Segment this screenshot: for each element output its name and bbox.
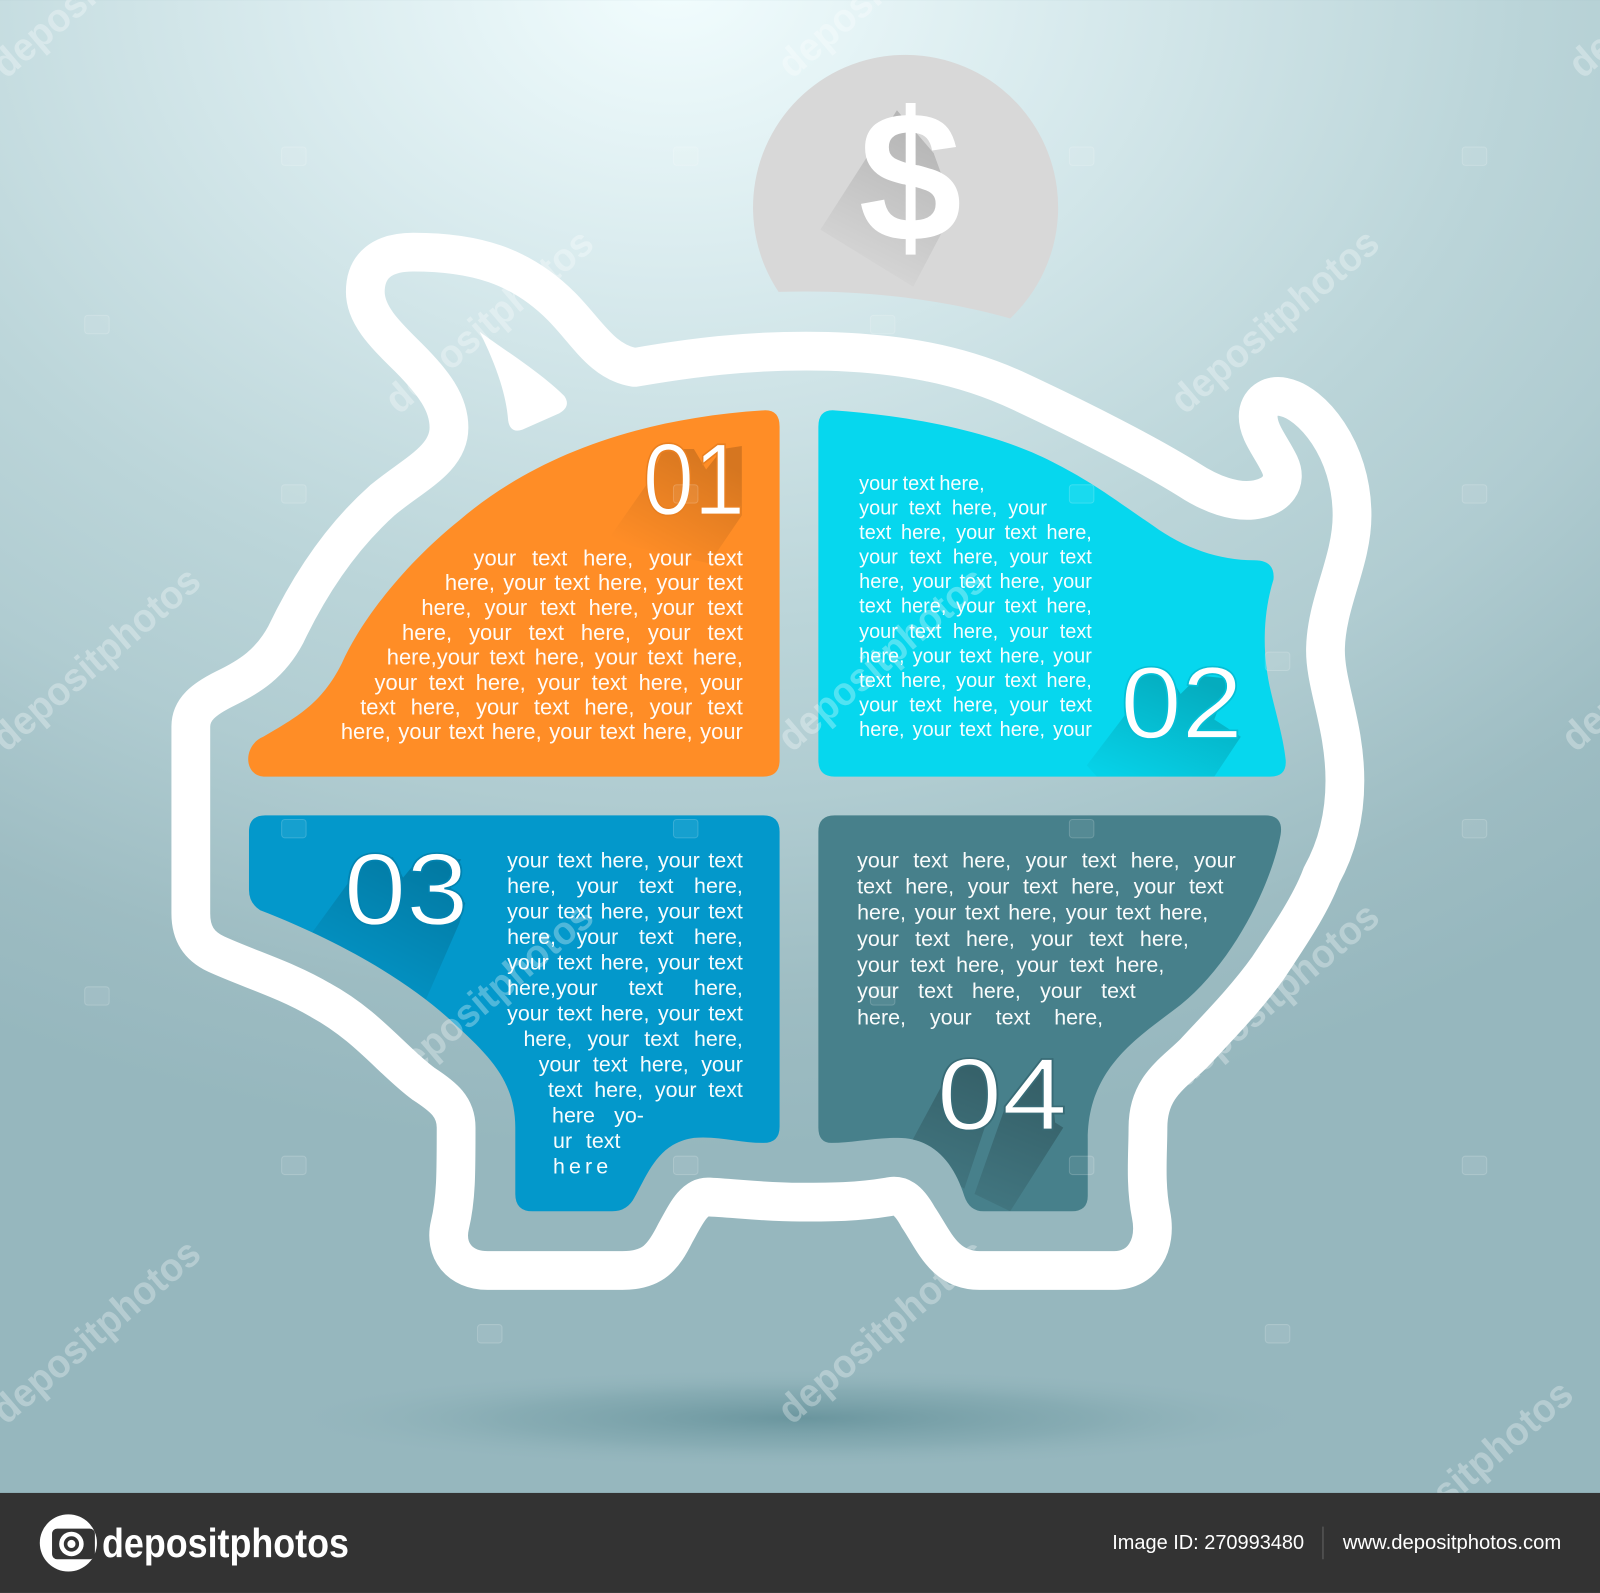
- logo wordmark: depositphotos: [102, 1520, 349, 1566]
- number shadow 04: [908, 1063, 1063, 1211]
- text block 03: here,your text here,: [507, 976, 743, 1000]
- icon: camera logo: [40, 1514, 97, 1572]
- text block 04: your text here, your text: [857, 979, 1136, 1003]
- number 03: 03: [344, 833, 468, 947]
- text block 04: [857, 848, 1236, 1030]
- text block 02: your text here, your text: [859, 621, 1092, 643]
- text block 03: your text here, your: [539, 1053, 743, 1077]
- text block 03: here, your text here,: [523, 1027, 743, 1051]
- watermarks: depositphotos: [376, 894, 602, 1096]
- text block 03: text here, your text: [548, 1078, 743, 1102]
- text block 01: here, your text here, your text: [421, 595, 743, 620]
- watermarks: depositphotos: [1162, 220, 1388, 422]
- number 01: 01: [643, 422, 745, 536]
- number shadow 02: [1087, 674, 1241, 777]
- number 04: 04: [937, 1038, 1067, 1152]
- text block 04: here, your text here,: [857, 1006, 1103, 1030]
- text block 03: here, your text here,: [507, 925, 743, 949]
- coin dollar long shadow: [820, 110, 954, 287]
- piggy tail nub: [480, 332, 567, 431]
- text block 02: text here, your text here,: [859, 670, 1092, 692]
- watermarks: depositphotos: [1356, 1371, 1582, 1573]
- text block 04: your text here, your text here,: [857, 927, 1189, 951]
- text block 03: [507, 848, 743, 1179]
- text block 01: here,your text here, your text here,: [387, 644, 743, 669]
- text block 02: [859, 473, 1092, 741]
- panel 04: dark teal: [818, 815, 1281, 1211]
- coin: [753, 55, 1058, 318]
- text block 02: here, your text here, your: [859, 645, 1092, 667]
- footer bar: [0, 1493, 1600, 1593]
- number shadow 03: [311, 857, 465, 1005]
- text block 03: your text here, your text: [507, 899, 743, 923]
- watermarks: depositphotos: [769, 1231, 995, 1432]
- image id: Image ID: 270993480: [1112, 1532, 1304, 1554]
- panel 01: orange: [248, 410, 780, 777]
- text block 03: here yo-: [552, 1104, 644, 1128]
- text block 04: your text here, your text here, your: [857, 848, 1236, 872]
- ground shadow: [270, 1367, 1332, 1469]
- watermarks: depositphotos: [769, 558, 995, 760]
- panel 03: blue: [249, 815, 780, 1211]
- text block 02: text here, your text here,: [859, 522, 1092, 544]
- text block 03: ur text: [553, 1129, 620, 1153]
- text block 01: here, your text here, your text: [402, 620, 743, 645]
- text block 02: your text here, your: [859, 497, 1047, 519]
- text block 03: here: [553, 1155, 608, 1179]
- text block 01: [341, 545, 743, 744]
- text block 02: here, your text here, your: [859, 571, 1092, 593]
- watermarks: depositphotos: [1162, 894, 1388, 1096]
- text block 01: here, your text here, your text: [445, 570, 743, 595]
- text block 02: text here, your text here,: [859, 595, 1092, 617]
- text block 02: your text here, your text: [859, 546, 1092, 568]
- icon: dollar sign: $: [859, 74, 962, 281]
- text block 01: your text here, your text here, your: [374, 670, 743, 695]
- text block 04: text here, your text here, your text: [857, 874, 1224, 898]
- text block 02: your text here,: [859, 473, 985, 495]
- text block 03: your text here, your text: [507, 1001, 743, 1025]
- text block 03: here, your text here,: [507, 874, 743, 898]
- text block 02: here, your text here, your: [859, 719, 1092, 741]
- number 02: 02: [1120, 646, 1243, 760]
- text block 04: here, your text here, your text here,: [857, 900, 1208, 924]
- text block 01: your text here, your text: [473, 545, 743, 570]
- text block 03: your text here, your text: [507, 950, 743, 974]
- text block 02: your text here, your text: [859, 694, 1092, 716]
- piggy bank outline: [191, 252, 1352, 1270]
- text block 04: your text here, your text here,: [857, 953, 1164, 977]
- watermarks: depositphotos: [376, 220, 602, 422]
- text block 01: text here, your text here, your text: [360, 694, 743, 719]
- panel 02: cyan: [818, 410, 1286, 777]
- website: www.depositphotos.com: [1342, 1532, 1561, 1554]
- text block 01: here, your text here, your text here, your: [341, 719, 743, 744]
- text block 03: your text here, your text: [507, 848, 743, 872]
- number shadow 01: [607, 446, 742, 563]
